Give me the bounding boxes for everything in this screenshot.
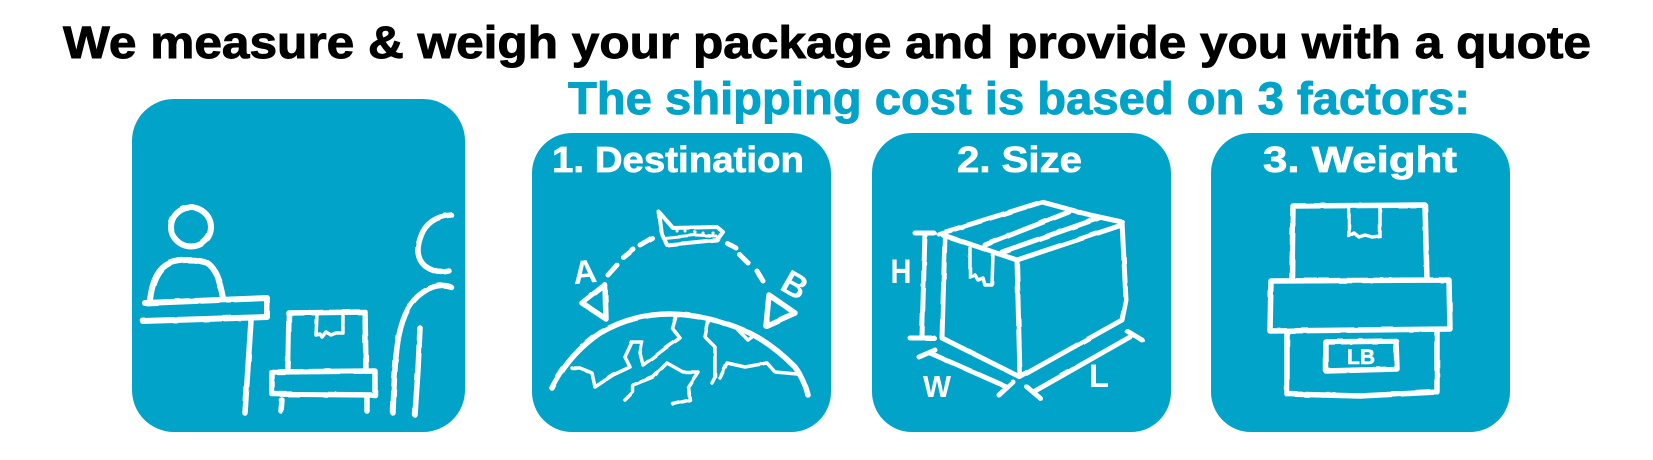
- panel: weight: [1211, 133, 1510, 432]
- icon: customer: [393, 215, 451, 415]
- scale readout: LB: LB: [1347, 346, 1375, 369]
- label: L: L: [1089, 358, 1109, 394]
- label: H: H: [890, 253, 912, 291]
- label: W: W: [923, 369, 952, 404]
- icon: airplane: [659, 212, 723, 245]
- icon: box in perspective: [939, 202, 1126, 377]
- dimension: length: [1027, 331, 1142, 398]
- panel: counter scene: [132, 99, 465, 432]
- subtitle: The shipping cost is based on 3 factors:: [568, 73, 1470, 124]
- dimension: width: [919, 350, 1013, 404]
- title: We measure & weigh your package and provide you with a quote: [63, 17, 1591, 68]
- panel: size: [872, 133, 1171, 432]
- icon: globe: [552, 314, 808, 404]
- panel: destination: [532, 133, 831, 432]
- heading: weight: 3. Weight: [1263, 139, 1457, 180]
- heading: size: 2. Size: [957, 139, 1082, 180]
- label: point A: A: [571, 252, 599, 291]
- icon: end marker: [766, 295, 795, 326]
- flight path dashes: [608, 238, 763, 281]
- icon: box on scale: [1270, 205, 1450, 396]
- icon: clerk behind desk: [143, 208, 267, 413]
- icon: start marker: [582, 285, 606, 319]
- icon: package on stand: [272, 312, 375, 411]
- heading: destination: 1. Destination: [552, 139, 804, 180]
- dimension: height: [890, 233, 934, 338]
- label: point B: B: [774, 263, 815, 308]
